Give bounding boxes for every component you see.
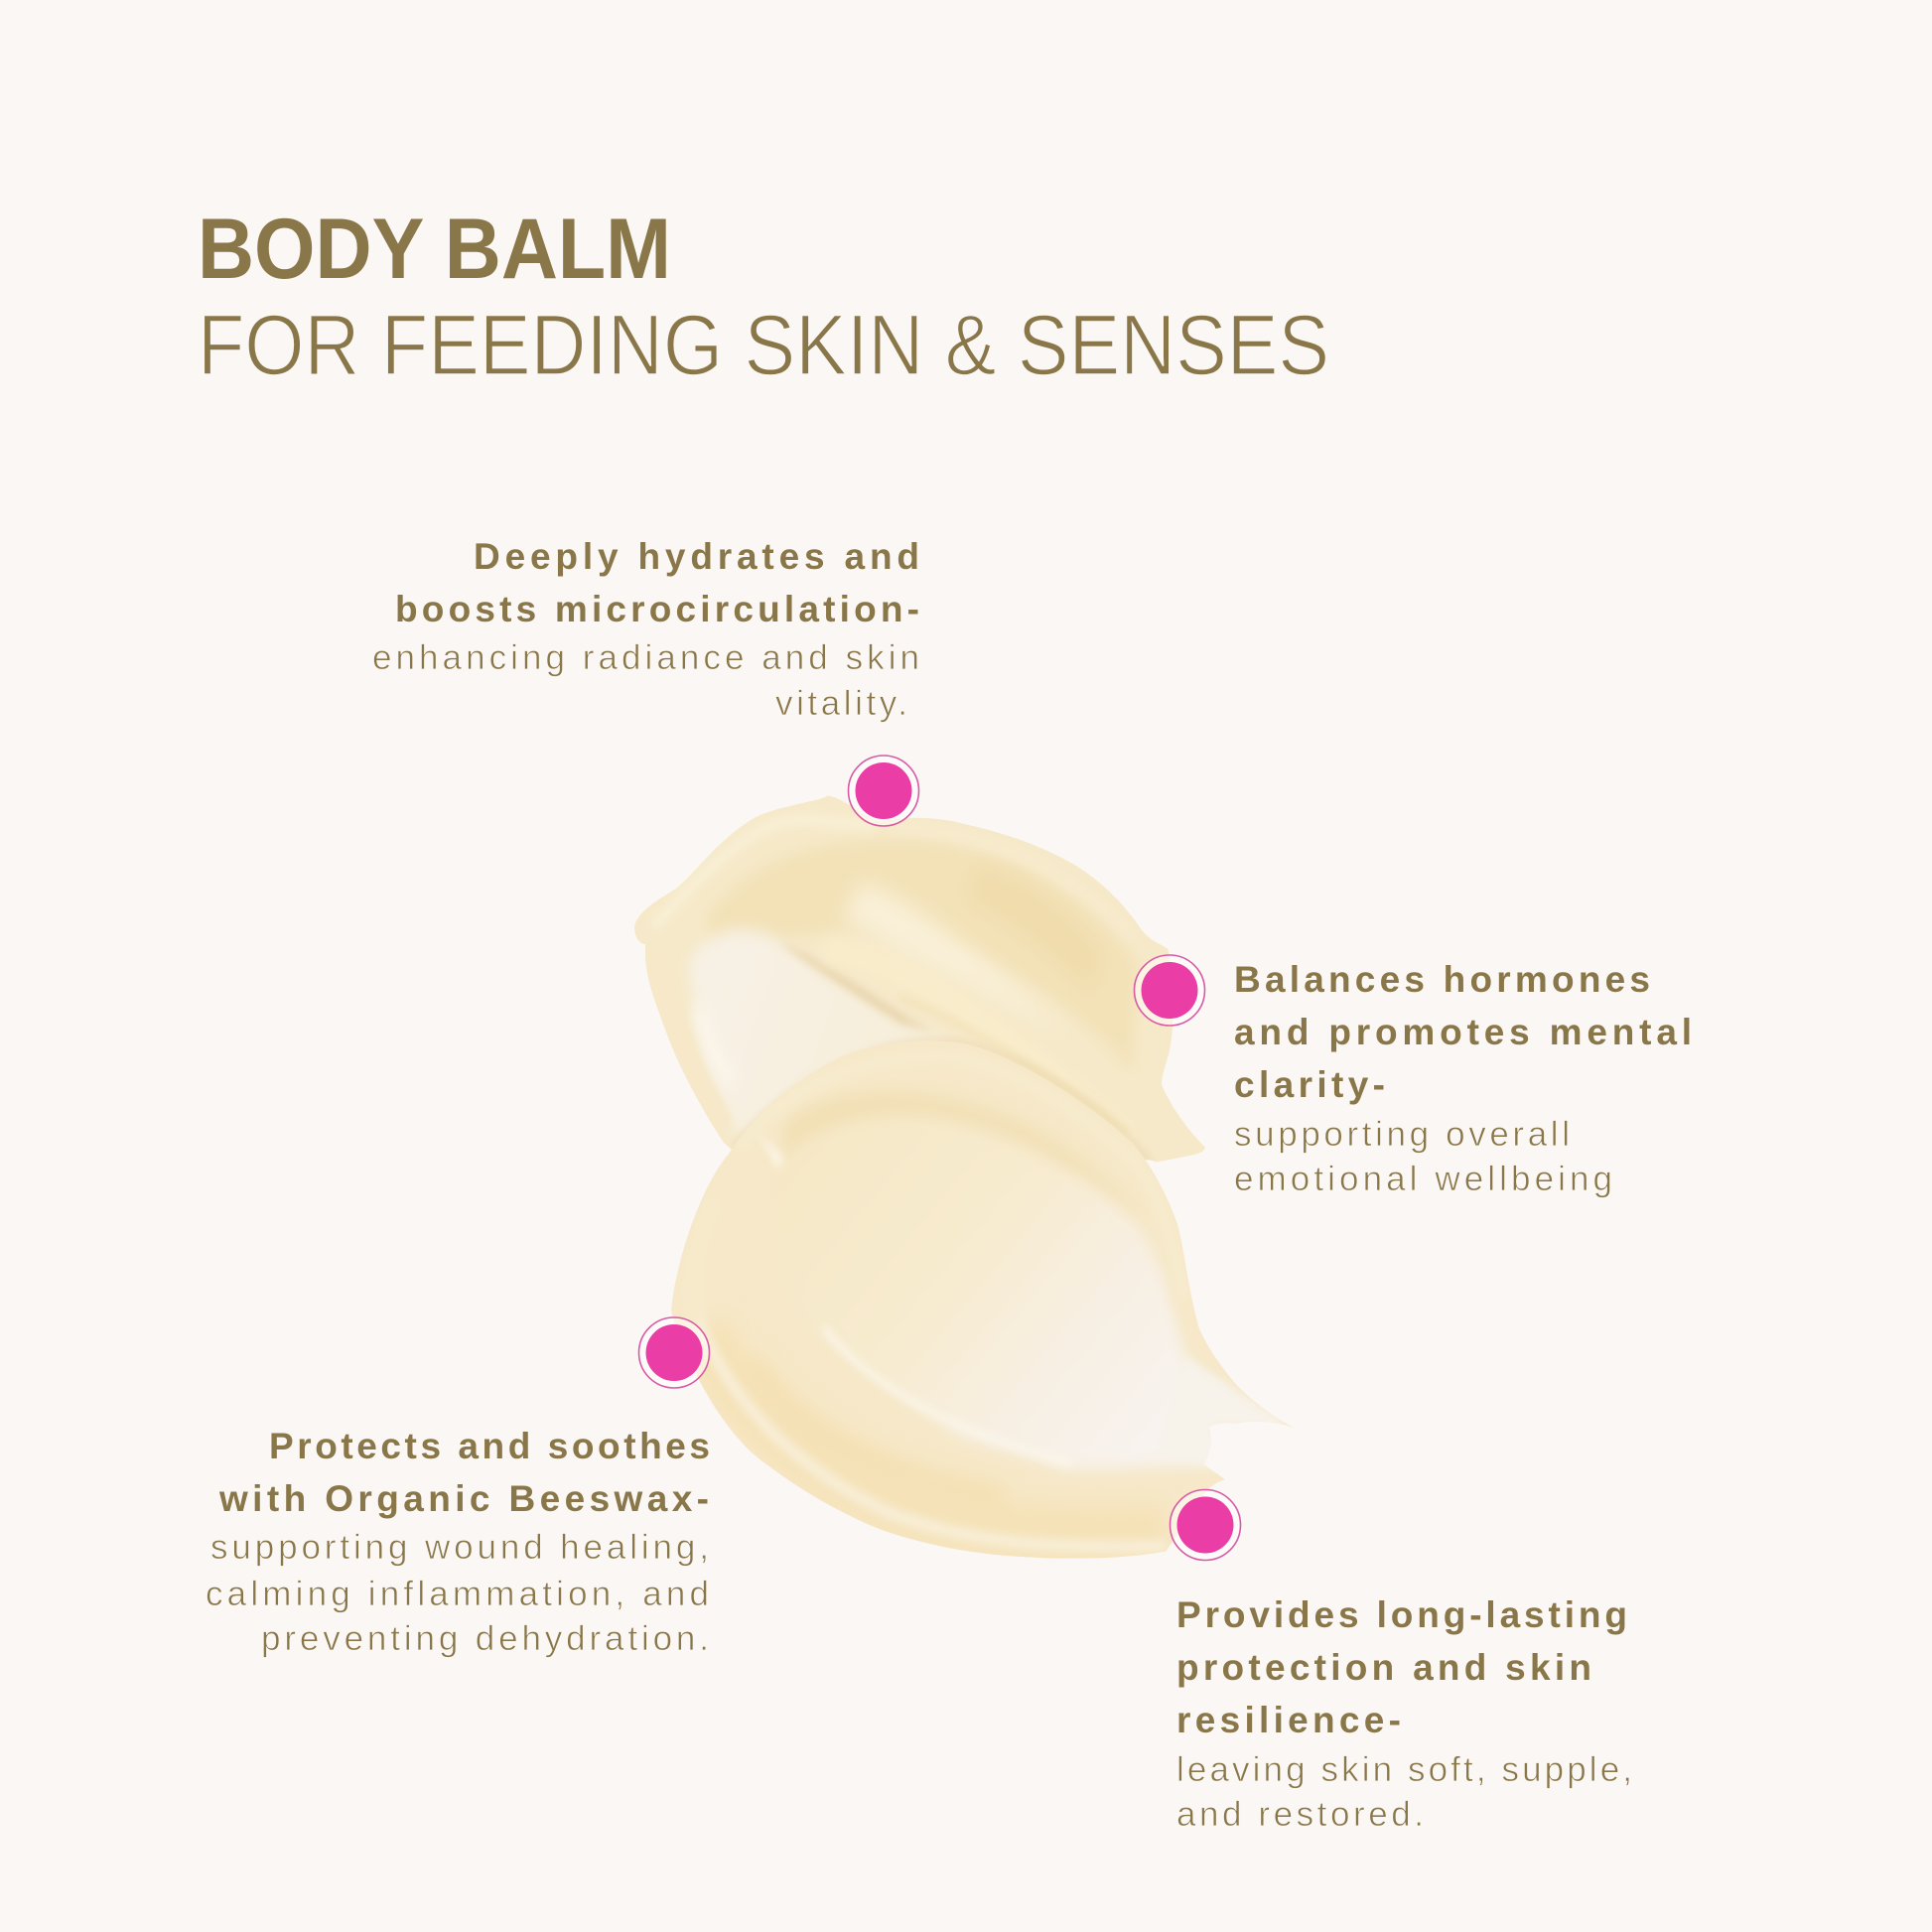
title [198, 202, 1329, 393]
callout: hydration and microcirculation: boosts microcirculation- [395, 589, 919, 629]
callout: long-lasting protection and resilience: Provides long-lasting [1176, 1594, 1627, 1635]
infographic canvas [203, 218, 1690, 1827]
callout: protection and soothing with beeswax: calming inflammation, and [206, 1575, 709, 1613]
callout: hormones and mental clarity: and promotes mental [1234, 1012, 1692, 1052]
marker: soothing point [639, 1317, 709, 1388]
callout: hormones and mental clarity: emotional wellbeing [1234, 1160, 1612, 1198]
callout: long-lasting protection and resilience: protection and skin [1176, 1647, 1591, 1688]
title: FOR FEEDING SKIN & SENSES [198, 298, 1329, 393]
callout: long-lasting protection and resilience: and restored. [1176, 1795, 1424, 1834]
callout: hormones and mental clarity: Balances hormones [1234, 959, 1650, 1000]
callout: protection and soothing with beeswax: preventing dehydration. [261, 1619, 709, 1658]
callout: hydration and microcirculation: Deeply hydrates and [474, 536, 919, 577]
callout: hormones and mental clarity [1234, 959, 1692, 1198]
callout: protection and soothing with beeswax: Protects and soothes [269, 1426, 710, 1466]
callout: hydration and microcirculation: vitality. [775, 684, 907, 723]
lower balm swatch [671, 1042, 1293, 1559]
callout: long-lasting protection and resilience: leaving skin soft, supple, [1176, 1750, 1632, 1789]
callout: protection and soothing with beeswax: supporting wound healing, [210, 1528, 709, 1567]
marker: hormone balance point [1134, 955, 1205, 1026]
upper balm swatch [634, 796, 1205, 1162]
callout: protection and soothing with beeswax: with Organic Beeswax- [218, 1478, 709, 1519]
callout: long-lasting protection and resilience [1176, 1594, 1632, 1834]
callout: long-lasting protection and resilience: resilience- [1176, 1700, 1401, 1740]
callout: hydration and microcirculation: enhancing radiance and skin [372, 638, 919, 677]
marker: hydration point [848, 756, 919, 826]
title: BODY BALM [198, 202, 671, 297]
callout: hydration and microcirculation [372, 536, 919, 723]
callout: protection and soothing with beeswax [206, 1426, 710, 1658]
balm swatch illustration [634, 796, 1293, 1559]
marker: protection point [1170, 1489, 1241, 1561]
callout: hormones and mental clarity: clarity- [1234, 1064, 1385, 1105]
callout: hormones and mental clarity: supporting overall [1234, 1115, 1570, 1154]
